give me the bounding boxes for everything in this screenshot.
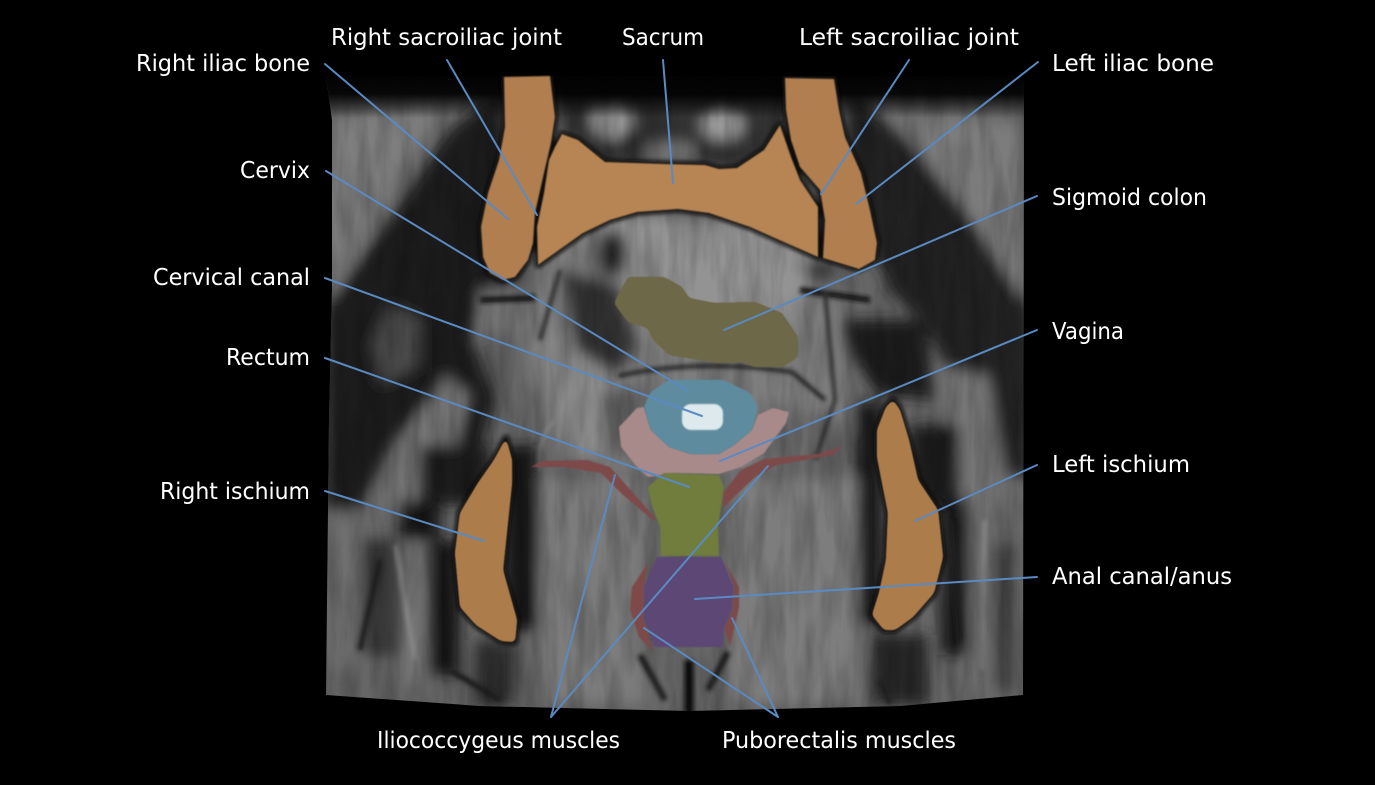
label: Sacrum: Sacrum bbox=[622, 25, 704, 51]
label: Rectum: Rectum bbox=[226, 345, 310, 371]
region: puborectalis muscle right bbox=[630, 563, 653, 652]
label: Right ischium: Right ischium bbox=[160, 479, 310, 505]
label: Right sacroiliac joint: Right sacroiliac joint bbox=[331, 25, 562, 51]
region: cervical canal bbox=[682, 404, 723, 430]
region: sigmoid colon bbox=[614, 277, 798, 367]
label: Right iliac bone: Right iliac bone bbox=[136, 51, 310, 77]
leader lines bbox=[325, 60, 1038, 717]
region: cervix bbox=[644, 380, 758, 454]
region: iliococcygeus muscle left bbox=[723, 446, 843, 508]
region: sacrum bbox=[537, 125, 818, 265]
region: right iliac bone bbox=[481, 76, 555, 280]
label: Puborectalis muscles: Puborectalis muscles bbox=[722, 728, 956, 754]
label: Left sacroiliac joint: Left sacroiliac joint bbox=[799, 25, 1019, 51]
label: Iliococcygeus muscles: Iliococcygeus muscles bbox=[377, 728, 620, 754]
region: left ischium bbox=[872, 400, 943, 630]
top fade bbox=[326, 76, 1024, 116]
region: vagina bbox=[619, 407, 789, 477]
label: Cervix: Cervix bbox=[240, 158, 310, 184]
region: puborectalis muscle left bbox=[724, 562, 739, 647]
label: Vagina: Vagina bbox=[1052, 319, 1124, 345]
label: Cervical canal: Cervical canal bbox=[153, 265, 310, 291]
region: rectum bbox=[648, 473, 724, 556]
label: Anal canal/anus: Anal canal/anus bbox=[1052, 564, 1232, 590]
scan texture bbox=[326, 76, 1024, 711]
region: right ischium bbox=[455, 438, 517, 642]
region: anal canal bbox=[644, 557, 734, 647]
region: iliococcygeus muscle right bbox=[531, 460, 657, 520]
label: Left ischium: Left ischium bbox=[1052, 452, 1190, 478]
region: left iliac bone bbox=[785, 78, 877, 269]
MRI scan background bbox=[320, 70, 1030, 715]
bone outlines bbox=[455, 76, 943, 642]
label: Left iliac bone: Left iliac bone bbox=[1052, 51, 1214, 77]
label: Sigmoid colon: Sigmoid colon bbox=[1052, 185, 1207, 211]
